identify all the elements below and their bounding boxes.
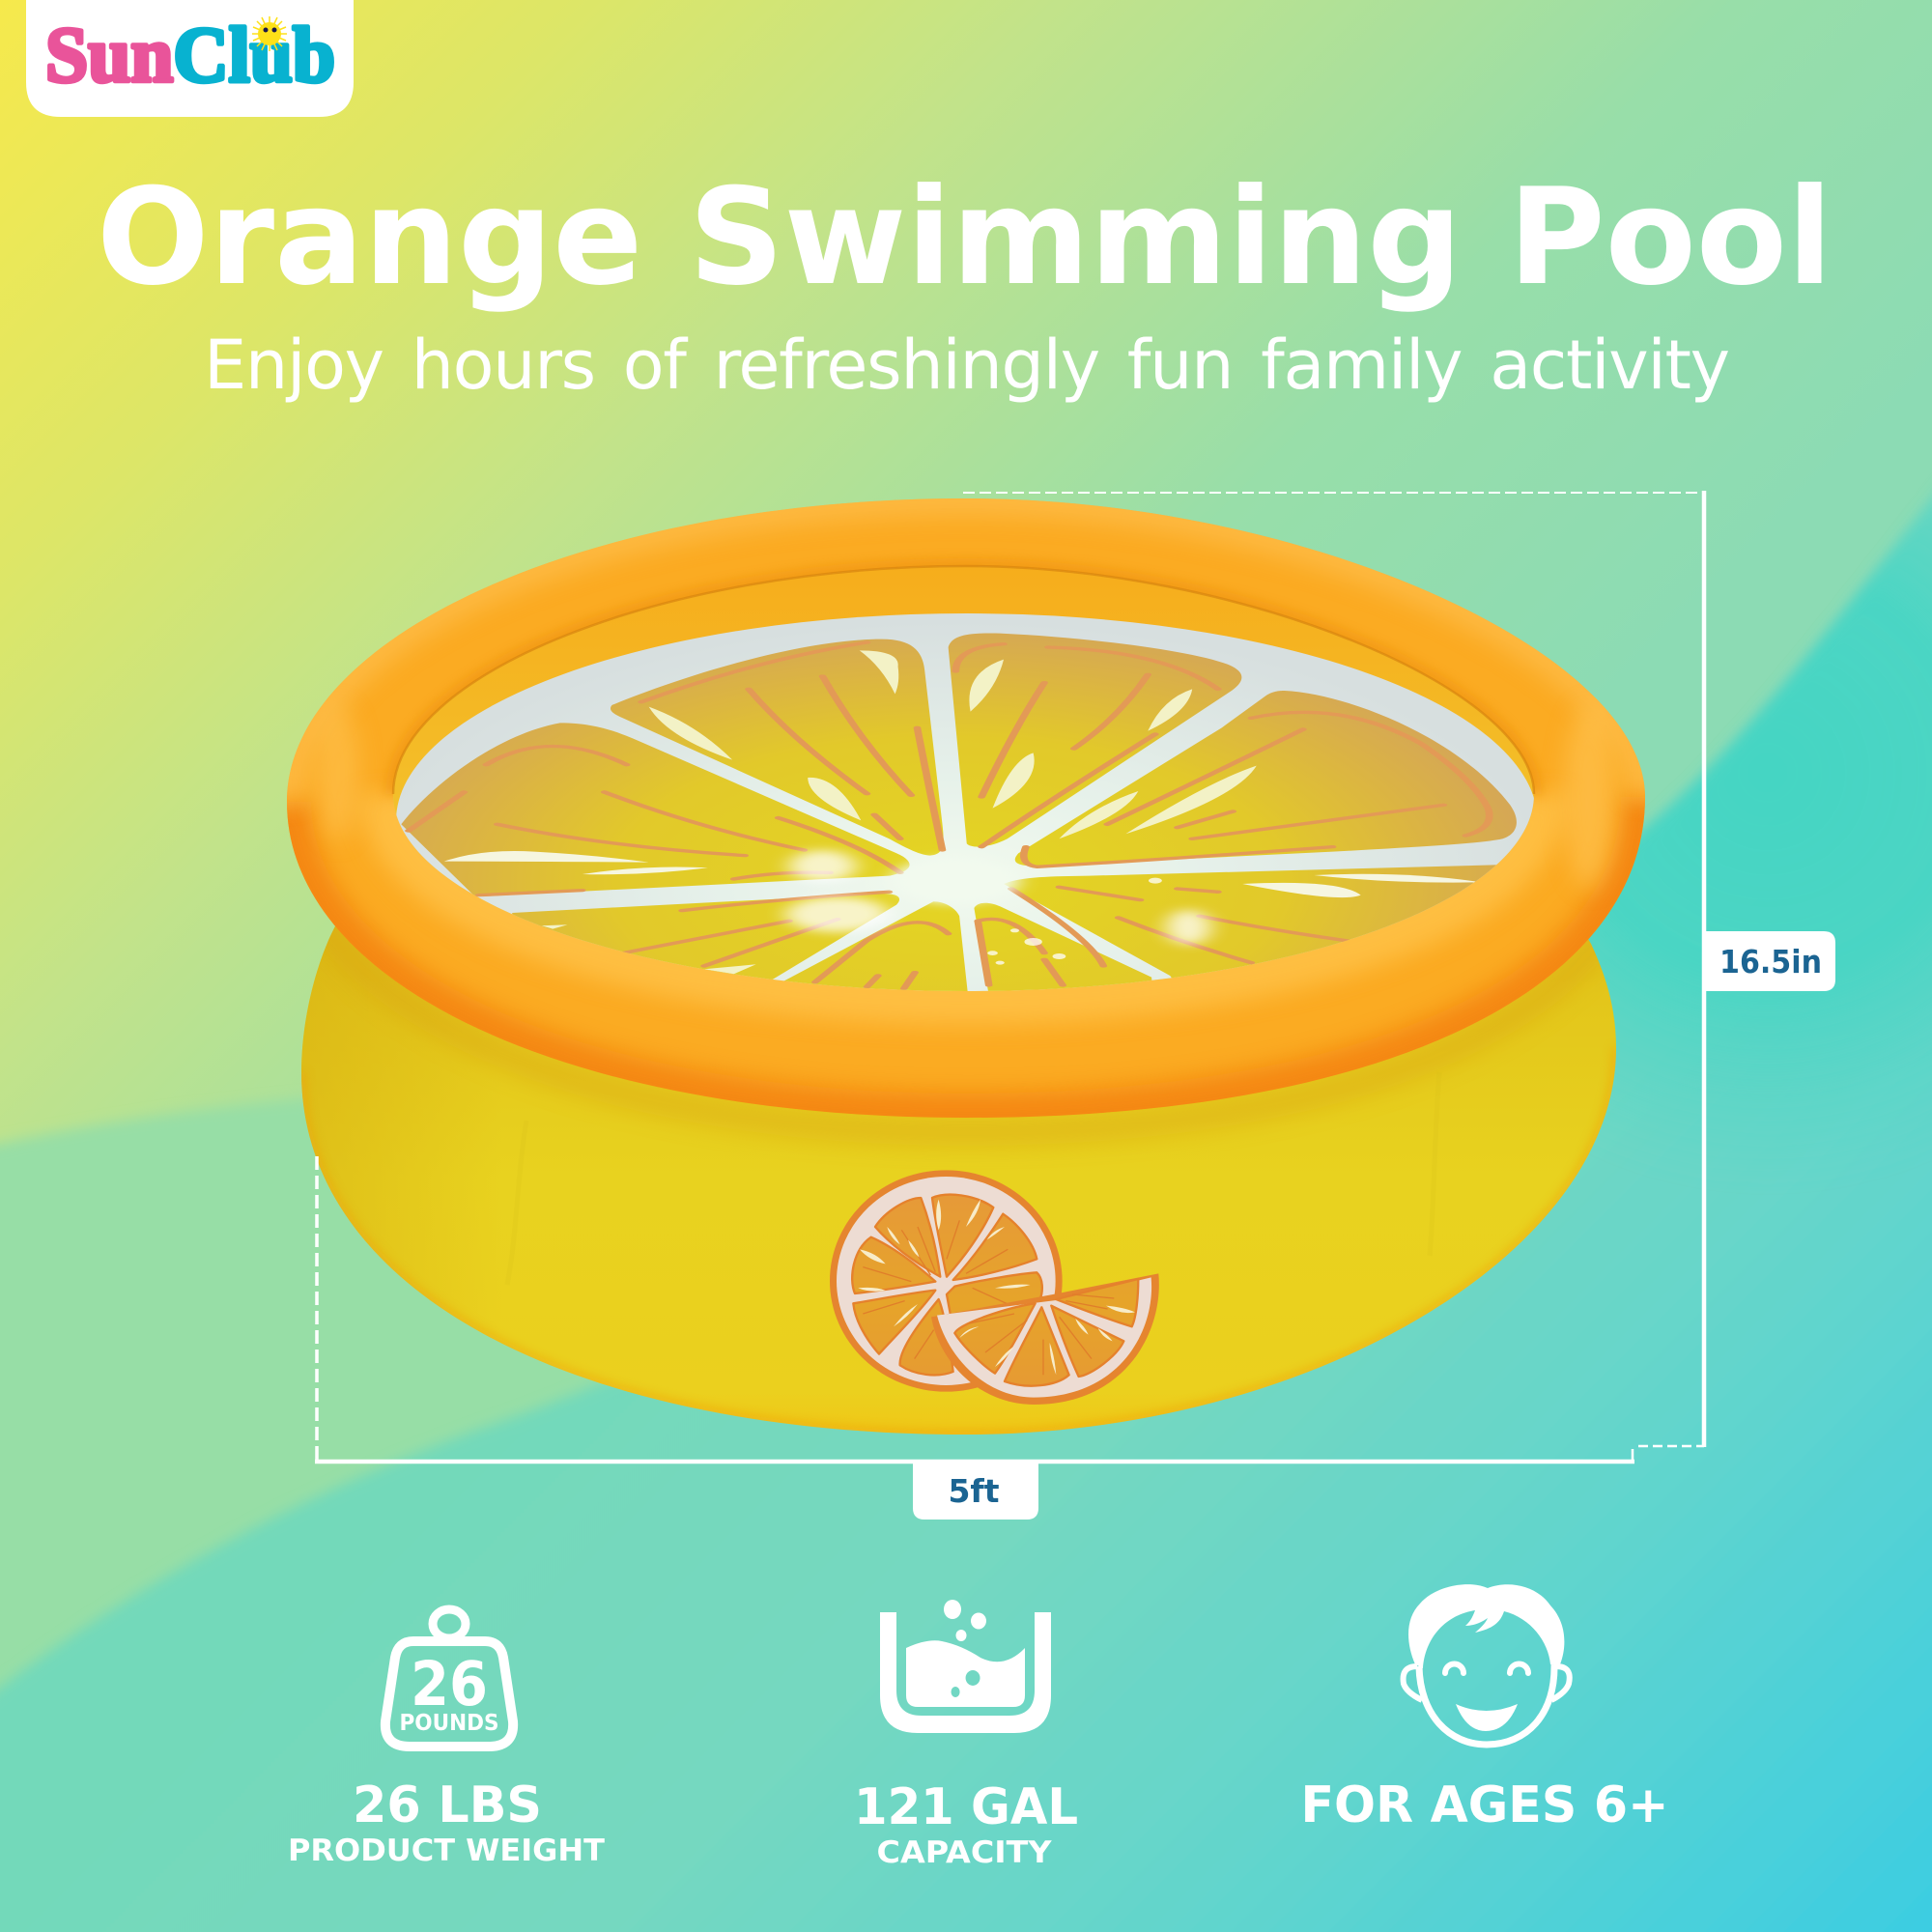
icon: child face bbox=[1404, 1584, 1570, 1745]
icon: weight: 26 bbox=[411, 1649, 488, 1719]
ring seam shadow bbox=[393, 566, 1534, 794]
ring inner edge bbox=[393, 566, 1534, 794]
icon: weight bbox=[385, 1609, 513, 1747]
pool body bbox=[301, 869, 1616, 1435]
pool illustration bbox=[280, 493, 1652, 1439]
center pith bbox=[893, 858, 1018, 903]
width dimension line bbox=[315, 1156, 1634, 1462]
stat: 121 GAL: 121 GAL bbox=[854, 1778, 1078, 1836]
caption: product weight: PRODUCT WEIGHT bbox=[288, 1833, 605, 1868]
spec: age bbox=[1300, 1584, 1669, 1834]
logo panel bbox=[26, 0, 354, 117]
hair bbox=[1408, 1584, 1564, 1668]
orange slice floor print bbox=[396, 613, 1538, 1029]
label: 5ft: 5ft bbox=[948, 1472, 1000, 1510]
eyes bbox=[1445, 1663, 1528, 1673]
caption: capacity: CAPACITY bbox=[877, 1835, 1052, 1870]
pulp veins bbox=[409, 642, 1490, 988]
ears bbox=[1404, 1666, 1570, 1700]
pool interior bbox=[393, 566, 1534, 991]
orange wedge bbox=[931, 1273, 1159, 1405]
orange slice emblem bbox=[830, 1170, 1159, 1405]
logo wordmark: SunClub bbox=[45, 11, 335, 99]
whole orange bbox=[830, 1170, 1063, 1392]
ring highlights bbox=[287, 498, 1645, 802]
spec: weight bbox=[288, 1609, 605, 1868]
icon: weight: POUNDS bbox=[400, 1711, 498, 1736]
subtitle: Enjoy hours of refreshingly fun family activity bbox=[204, 326, 1730, 405]
stat: 26 LBS: 26 LBS bbox=[353, 1776, 542, 1834]
logo sun bbox=[252, 16, 287, 51]
water light glare bbox=[785, 850, 1210, 945]
spec: capacity bbox=[854, 1600, 1078, 1870]
title: Orange Swimming Pool bbox=[97, 159, 1833, 315]
stat: ages: FOR AGES 6+ bbox=[1300, 1776, 1669, 1834]
face outline bbox=[1419, 1664, 1554, 1745]
icon: tub with water bbox=[880, 1600, 1051, 1733]
label: 5ft bbox=[913, 1463, 1038, 1520]
juice segments bbox=[401, 634, 1517, 1017]
label: 16.5in bbox=[1705, 931, 1835, 991]
height dimension line bbox=[963, 491, 1704, 1447]
inner wall bbox=[393, 566, 1534, 869]
floor bbox=[396, 613, 1538, 1029]
label: 16.5in: 16.5in bbox=[1719, 943, 1822, 980]
mouth bbox=[1456, 1704, 1518, 1731]
ring lower shading bbox=[287, 797, 1645, 1118]
inflatable ring bbox=[280, 493, 1652, 1125]
pulp highlights bbox=[444, 650, 1481, 974]
